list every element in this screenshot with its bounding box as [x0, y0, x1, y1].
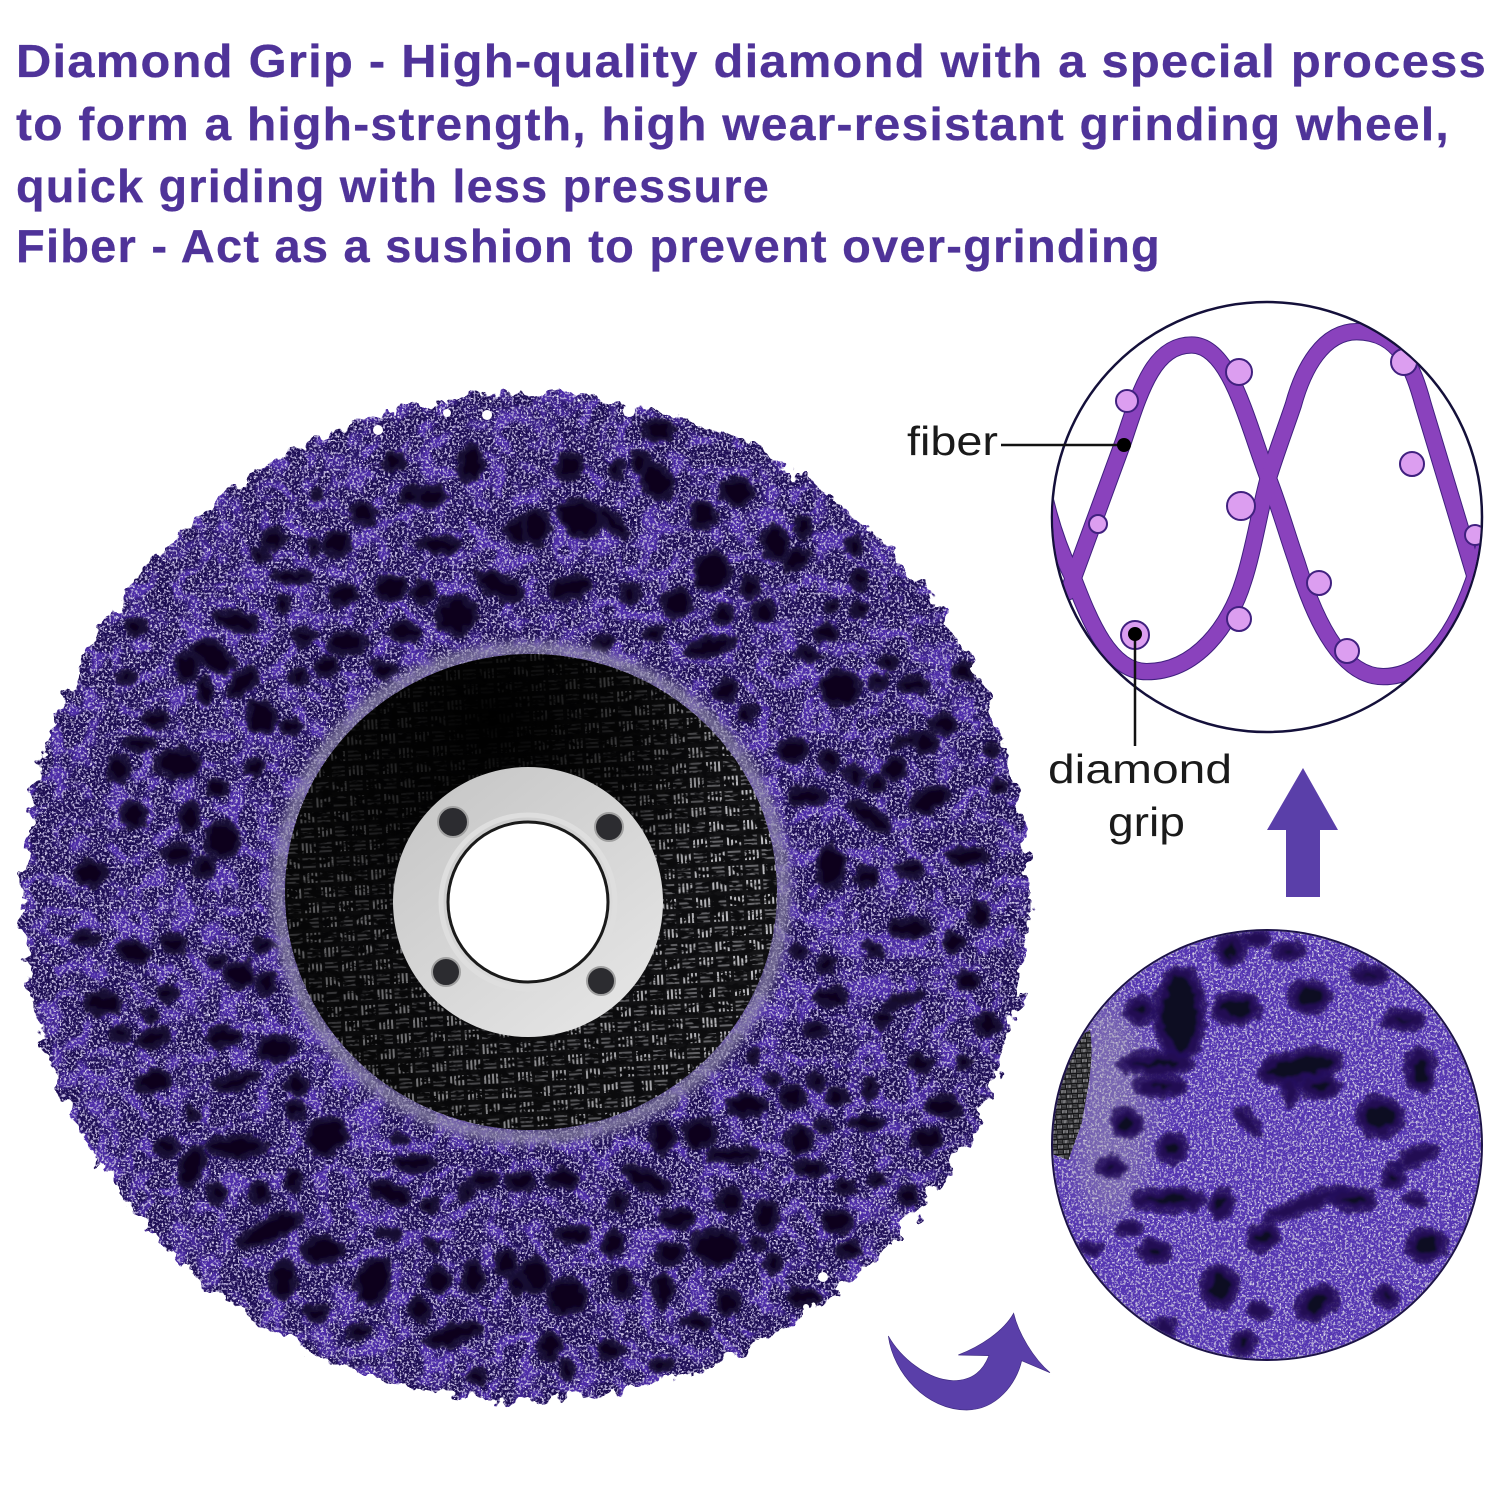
metal flange — [393, 767, 663, 1037]
label: diamond grip — [1048, 627, 1232, 845]
magnified texture lens — [1050, 928, 1484, 1362]
heading line 4: Fiber - Act as a sushion to prevent over-grinding — [16, 220, 1161, 272]
disc holes — [73, 420, 1006, 1383]
lens holes — [1082, 933, 1443, 1356]
fiber leader dot — [1117, 438, 1131, 452]
white gaps near disc edge — [373, 405, 828, 1310]
heading line 3: quick griding with less pressure — [16, 160, 770, 212]
fiber strands — [1043, 332, 1487, 677]
diamond grip leader dot — [1128, 627, 1142, 641]
lens texture — [1050, 928, 1484, 1362]
arrow: up — [1267, 768, 1338, 897]
label: diamond grip: diamond — [1048, 746, 1232, 792]
center hole — [448, 822, 608, 982]
magnified fiber diagram — [1043, 302, 1487, 732]
label: diamond grip: grip — [1108, 799, 1185, 845]
grinding disc — [0, 370, 1060, 1420]
heading line 1: Diamond Grip - High-quality diamond with a special process — [16, 35, 1487, 87]
gray inner rim — [279, 649, 783, 1137]
woven backing sliver — [1050, 1030, 1092, 1160]
diagram circle — [1052, 302, 1482, 732]
raised collar — [441, 815, 615, 989]
arrow: curved — [888, 1313, 1050, 1410]
heading line 2: to form a high-strength, high wear-resistant grinding wheel, — [16, 98, 1450, 150]
diamond grip leader line — [1134, 635, 1136, 746]
label: fiber — [907, 418, 1131, 464]
disc abrasive body — [0, 370, 1060, 1420]
lens outline — [1052, 930, 1482, 1360]
gray left band — [1070, 1000, 1150, 1220]
fiber leader line — [1001, 444, 1124, 446]
label: fiber: fiber — [907, 418, 998, 464]
screw holes — [432, 807, 623, 995]
black woven backing — [280, 650, 780, 1135]
heading text — [16, 35, 1487, 272]
diamond grains — [1089, 349, 1485, 663]
